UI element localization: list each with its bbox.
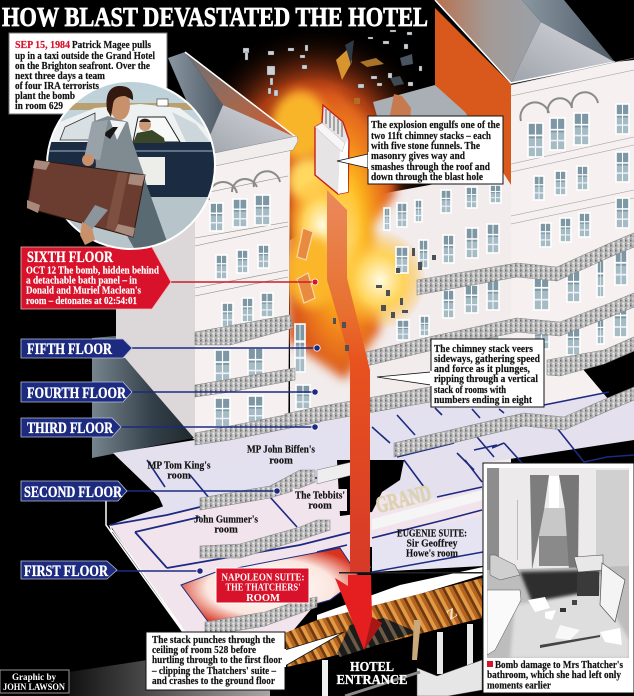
photo panel: bathroom damage	[483, 463, 634, 693]
GRAND sign: GRAND	[373, 480, 434, 518]
left tower facade	[195, 58, 634, 480]
room labels: MP John Biffen's	[247, 444, 315, 456]
callout: chimney explosion: with five stone funnels. The	[371, 140, 480, 152]
callout box: Sep 15 1984	[9, 33, 167, 114]
credit: Graphic by	[12, 673, 56, 683]
red callout: sixth floor: SIXTH FLOOR	[27, 249, 114, 266]
callout text: Sep 15 1984: next three days a team	[15, 70, 105, 82]
callout: chimney stack veers: sideways, gathering speed	[434, 353, 540, 365]
floor plates	[106, 346, 634, 640]
bottom left light beam	[69, 640, 270, 696]
room labels: MP Tom King's	[148, 460, 210, 472]
label: third floor: THIRD FLOOR	[27, 420, 114, 437]
credit: JOHN LAWSON	[3, 683, 65, 693]
callout: chimney stack veers: and force as it plunges,	[434, 363, 530, 375]
callout: chimney explosion: The explosion engulfs one of the	[371, 119, 500, 131]
callout: chimney stack veers	[377, 339, 544, 407]
left tower roof	[168, 52, 297, 160]
callout text: Sep 15 1984: SEP 15, 1984	[15, 39, 70, 51]
Napoleon suite room glow	[181, 548, 360, 627]
callout: stack punches through: hurtling through to the first floor	[152, 654, 282, 666]
Napoleon suite label: NAPOLEON SUITE:	[222, 572, 304, 584]
suitcase	[27, 160, 145, 237]
callout: chimney explosion	[337, 116, 503, 184]
room labels: John Gummer's	[194, 514, 258, 526]
label: fourth floor: FOURTH FLOOR	[27, 385, 127, 402]
white ledge and ground floor band	[317, 515, 483, 630]
caption	[487, 659, 624, 692]
callout text: Sep 15 1984: in room 629	[15, 100, 63, 112]
room labels: EUGENIE SUITE:	[397, 528, 467, 540]
red callout: sixth floor	[21, 247, 171, 309]
red callout: sixth floor: Donald and Muriel Maclean's	[26, 284, 142, 296]
callout text: Sep 15 1984: plant the bomb	[15, 90, 75, 102]
callout: stack punches through: The stack punches through the	[152, 634, 275, 646]
left wing side wall	[92, 170, 195, 458]
credit	[0, 670, 69, 693]
callout: chimney explosion: smashes through the roof and	[371, 161, 490, 173]
red callout: sixth floor: OCT 12	[26, 264, 56, 276]
right tower roof	[435, 0, 615, 83]
callout text: Sep 15 1984: Patrick Magee pulls	[72, 39, 152, 51]
callout: stack punches through: ceiling of room 528 before	[152, 644, 256, 656]
callout text: Sep 15 1984: of four IRA terrorists	[15, 80, 100, 92]
room labels: room	[269, 456, 293, 466]
label: second floor: SECOND FLOOR	[24, 484, 123, 501]
callout: chimney stack veers: stack of rooms with	[434, 384, 506, 396]
dark hole in floors	[337, 460, 404, 590]
floor plan blue walls	[110, 392, 634, 612]
room labels: room	[214, 524, 238, 536]
label: fifth floor	[21, 339, 320, 358]
room labels: Howe's room	[406, 548, 458, 560]
fire glow against the dark sky	[190, 30, 435, 270]
callout: chimney explosion: down through the blast hole	[371, 171, 483, 183]
label: first floor: FIRST FLOOR	[24, 563, 109, 580]
room labels	[148, 444, 467, 560]
label: third floor	[21, 418, 318, 437]
ground floor columns and plinth	[322, 620, 482, 696]
fire body	[272, 88, 426, 380]
room labels: room	[167, 470, 191, 482]
arm and hand	[80, 205, 108, 245]
Napoleon suite label	[216, 568, 309, 604]
illustration: Magee and taxi	[27, 81, 220, 257]
label: fifth floor: FIFTH FLOOR	[27, 341, 113, 358]
red callout: sixth floor: room – detonates at 02:54:01	[26, 295, 137, 307]
callout: stack punches through	[146, 632, 344, 690]
red callout: sixth floor: The bomb, hidden behind	[58, 264, 159, 276]
hotel entrance label: ENTRANCE	[336, 673, 408, 688]
room labels: Sir Geoffrey	[406, 538, 458, 550]
callout: chimney explosion: masonry gives way and	[371, 150, 465, 162]
callout text: Sep 15 1984	[15, 39, 155, 112]
blast lines to floor markers: sixth floor	[170, 279, 318, 285]
hotel entrance label: HOTEL	[350, 660, 394, 675]
Napoleon suite label: ROOM	[246, 593, 280, 604]
caption: moments earlier	[487, 680, 551, 692]
mid section facade	[290, 170, 511, 480]
callout: chimney stack veers: numbers ending in eight	[434, 394, 532, 406]
photo	[487, 468, 629, 658]
right tower orange side wall	[435, 8, 511, 185]
callout: chimney stack veers: The chimney stack veers	[434, 343, 534, 355]
far roof with chimney	[373, 85, 485, 180]
callout: stack punches through: – clipping the Thatchers' suite –	[151, 665, 276, 677]
title: HOW BLAST DEVASTATED THE HOTEL	[2, 2, 428, 32]
falling chimney shaft arrow	[327, 190, 382, 650]
callout: chimney explosion: two 11ft chimney stacks – each	[371, 130, 491, 142]
red callout: sixth floor: a detachable bath panel – in	[26, 274, 137, 286]
callout text: Sep 15 1984: on the Brighton seafront. Over the	[15, 60, 150, 72]
room labels: The Tebbits'	[295, 490, 345, 502]
hotel entrance label	[336, 660, 408, 688]
burning windows	[297, 228, 315, 303]
taxi and street	[48, 98, 214, 248]
label: second floor	[21, 481, 280, 501]
man	[82, 86, 146, 212]
room labels: room	[308, 500, 332, 512]
label: first floor	[21, 561, 203, 580]
chimney stack	[315, 105, 349, 194]
windows	[210, 104, 629, 429]
entrance awning: Z	[444, 606, 460, 623]
entrance awning	[285, 578, 482, 667]
callout text: Sep 15 1984: up in a taxi outside the Grand Hotel	[15, 50, 155, 62]
right wing facade	[511, 60, 634, 440]
balconies	[195, 233, 634, 636]
callout: stack punches through: and crashes to the ground floor	[152, 675, 275, 687]
label: fourth floor	[21, 382, 318, 402]
callout: chimney stack veers: ripping through a vertical	[434, 373, 538, 385]
flying debris	[243, 30, 436, 351]
Napoleon suite label: THE THATCHERS'	[226, 582, 301, 594]
